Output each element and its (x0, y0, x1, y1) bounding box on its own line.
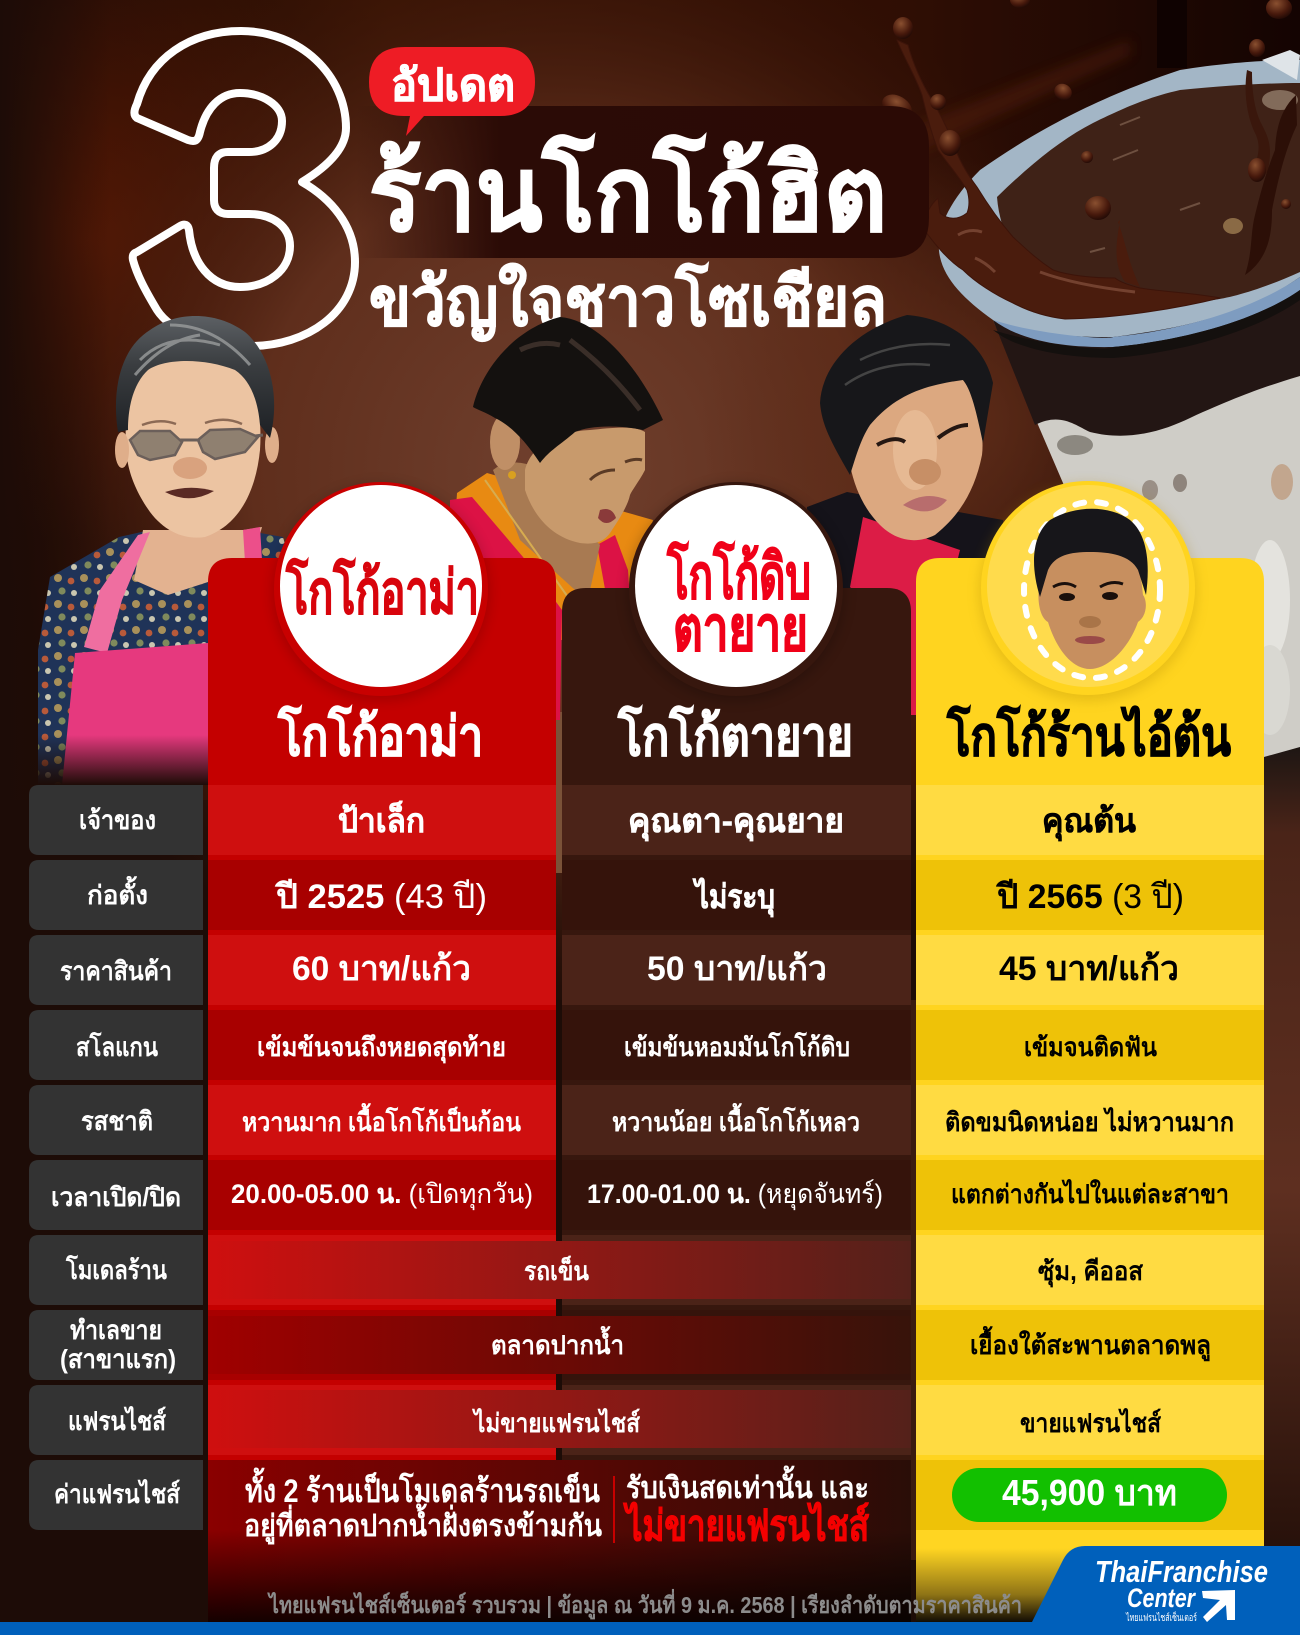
row values: location: ตลาดปากน้ำ (491, 1325, 624, 1360)
row values: owner: คุณต้น (1042, 802, 1136, 842)
row values: owner: ป้าเล็ก (338, 800, 425, 839)
row values: founded (274, 877, 1184, 918)
merged rows across two columns (208, 1241, 911, 1635)
row values: price (292, 950, 1179, 988)
title band (356, 106, 929, 258)
row label: franchise: แฟรนไชส์ (68, 1405, 166, 1436)
note: cash only, no franchise: ไม่ขายแฟรนไชส์ (623, 1501, 869, 1549)
row values: price: 60 บาท/แก้ว (292, 950, 471, 988)
row values: franchise (471, 1407, 1161, 1438)
note: both shops are carts (244, 1467, 615, 1545)
logo badge: Koko Dib Ta Yai: โกโก้ดิบ (666, 540, 811, 612)
numeral 3 outline (133, 31, 355, 346)
footer credit: ไทยแฟรนไชส์เซ็นเตอร์ รวบรวม | ข้อมูล ณ วันที่ 9 ม.ค. 2568 | เรียงลำดับตามราคาสินค้า (266, 1588, 1022, 1620)
logo badge: Koko Dib Ta Yai (627, 482, 845, 701)
row values: owner (338, 800, 1136, 842)
logo badge: Ai Ton face (979, 481, 1197, 701)
droplets (893, 17, 913, 39)
illustration: chocolate cup with splash (878, 0, 1300, 790)
row values: owner: คุณตา-คุณยาย (628, 802, 844, 842)
row label: franchise fee (29, 1460, 203, 1530)
row label: slogan (29, 1010, 203, 1080)
row values: price: 50 บาท/แก้ว (647, 950, 827, 988)
row values: hours: แตกต่างกันไปในแต่ละสาขา (951, 1178, 1229, 1209)
row label: location (29, 1310, 203, 1380)
franchise fee pill (952, 1468, 1227, 1522)
cup surface (997, 83, 1300, 317)
row label: franchise (29, 1385, 203, 1455)
row values: slogan: เข้มข้นหอมมันโกโก้ดิบ (624, 1031, 850, 1062)
row values: taste: หวานน้อย เนื้อโกโก้เหลว (612, 1102, 860, 1137)
row values: location: เยื้องใต้สะพานตลาดพลู (970, 1325, 1211, 1362)
row label: location: (สาขาแรก) (60, 1344, 176, 1374)
row values: slogan: เข้มจนติดฟัน (1024, 1032, 1157, 1062)
logo badge: Koko Dib Ta Yai: ตายาย (673, 595, 808, 664)
row values: hours (231, 1178, 1229, 1211)
row label: hours (29, 1160, 203, 1230)
column: Koko Ama (208, 558, 556, 1635)
row values: slogan (257, 1031, 1157, 1064)
row label: store model: โมเดลร้าน (65, 1254, 167, 1285)
logo: ThaiFranchise Center (0, 1546, 1300, 1635)
row label: taste (29, 1085, 203, 1155)
photo: owner of Koko Raan Ai Ton (807, 315, 1003, 715)
cup rim (939, 60, 1300, 337)
note: cash only, no franchise (623, 1465, 869, 1549)
row label: hours: เวลาเปิด/ปิด (51, 1182, 181, 1212)
row values: hours: 17.00-01.00 น. (หยุดจันทร์) (587, 1178, 883, 1211)
row values: taste: ติดขมนิดหน่อย ไม่หวานมาก (945, 1106, 1234, 1137)
cup body (993, 280, 1300, 790)
splash (897, 40, 1220, 319)
row values: founded: ปี 2565 (3 ปี) (995, 878, 1184, 916)
photo: owner of Koko Ama (30, 316, 300, 785)
column title: Koko Raan Ai Ton: โกโก้ร้านไอ้ต้น (946, 705, 1231, 767)
photo: owner of Koko Ta Yai (450, 317, 663, 720)
row values: taste (242, 1102, 1234, 1137)
badge: update speech bubble (369, 47, 535, 136)
logo: ThaiFranchise Center: ThaiFranchise (1095, 1554, 1268, 1589)
row label: franchise fee: ค่าแฟรนไชส์ (54, 1478, 180, 1509)
row label: slogan: สโลแกน (76, 1031, 158, 1062)
row values: location (491, 1325, 1211, 1362)
row values: founded: ปี 2525 (43 ปี) (274, 878, 487, 916)
logo: ThaiFranchise Center: Center (1127, 1583, 1196, 1613)
row values: store model (524, 1255, 1143, 1288)
row values: founded: ไม่ระบุ (692, 877, 775, 918)
row label: taste: รสชาติ (81, 1106, 153, 1136)
row label: price (29, 935, 203, 1005)
row values: franchise: ไม่ขายแฟรนไชส์ (471, 1407, 640, 1438)
title: sub heading: ขวัญใจชาวโซเชียล (369, 262, 887, 342)
row label: price: ราคาสินค้า (60, 956, 172, 986)
row label: store model (29, 1235, 203, 1305)
row values: hours: 20.00-05.00 น. (เปิดทุกวัน) (231, 1179, 533, 1211)
row label: owner (29, 785, 203, 855)
title: main heading: ร้านโกโก้ฮิต (369, 134, 887, 253)
row values: taste: หวานมาก เนื้อโกโก้เป็นก้อน (242, 1102, 521, 1137)
row label: founded: ก่อตั้ง (87, 875, 148, 910)
row values: store model: รถเข็น (524, 1255, 589, 1286)
note: cash only, no franchise: รับเงินสดเท่านั้น และ (626, 1465, 869, 1505)
row values: store model: ซุ้ม, คีออส (1038, 1256, 1143, 1288)
logo badge: Koko Ama (272, 482, 490, 701)
row label: founded (29, 860, 203, 930)
column: Koko Ta Yai (562, 588, 911, 1635)
column title: Koko Ama: โกโก้อาม่า (277, 705, 483, 767)
column title: Koko Ta Yai: โกโก้ตายาย (617, 705, 853, 767)
row label: location: ทำเลขาย (70, 1315, 162, 1345)
row values: slogan: เข้มข้นจนถึงหยดสุดท้าย (257, 1032, 506, 1064)
franchise fee pill: 45,900 บาท (1002, 1472, 1177, 1513)
badge: update speech bubble: อัปเดต (391, 61, 515, 110)
column: Koko Raan Ai Ton (916, 558, 1264, 1622)
logo: ThaiFranchise Center: ไทยแฟรนไชส์เซ็นเตอร์ (1125, 1610, 1197, 1624)
row values: price: 45 บาท/แก้ว (999, 950, 1179, 988)
logo badge: Koko Ama: โกโก้อาม่า (285, 557, 479, 626)
note: both shops are carts: ทั้ง 2 ร้านเป็นโมเดลร้านรถเข็น (245, 1467, 600, 1509)
note: both shops are carts: อยู่ที่ตลาดปากน้ำฝั่งตรงข้ามกัน (244, 1503, 602, 1545)
row label: owner: เจ้าของ (79, 805, 156, 835)
row values: franchise: ขายแฟรนไชส์ (1020, 1407, 1161, 1438)
